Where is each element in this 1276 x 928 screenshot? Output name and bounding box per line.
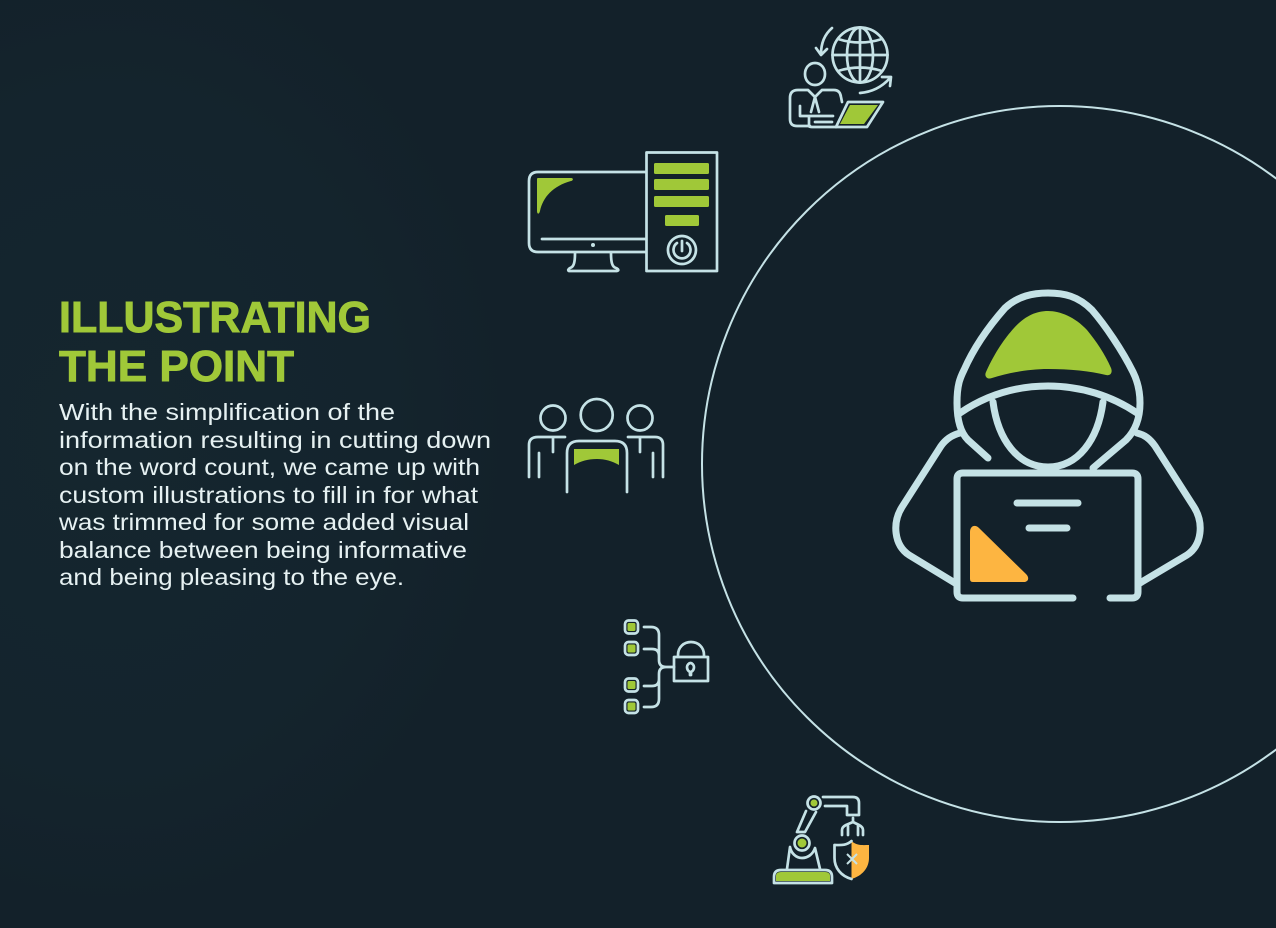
face	[993, 402, 1103, 467]
text block: description: and being pleasing to the eye.	[59, 564, 404, 590]
hood rim	[960, 386, 1137, 413]
title	[59, 293, 371, 391]
globe	[832, 28, 888, 82]
text block: description: balance between being informative	[59, 537, 467, 563]
arm dome	[787, 847, 820, 869]
text block: description: was trimmed for some added visual	[58, 509, 469, 535]
icon: network nodes to padlock	[625, 620, 708, 713]
top arm and gripper	[823, 797, 863, 835]
icon: team of three people	[529, 399, 663, 492]
person	[790, 63, 842, 127]
shield x	[847, 854, 857, 864]
arrows	[816, 28, 891, 93]
large circle outline	[702, 106, 1276, 822]
nodes	[625, 620, 638, 713]
laptop screen lines	[1017, 503, 1078, 528]
shield	[852, 841, 869, 879]
icon: person with globe and laptop	[790, 28, 891, 127]
arm segment	[797, 811, 816, 832]
padlock	[674, 642, 708, 681]
left arm	[896, 433, 960, 583]
tower	[646, 152, 717, 271]
text block: description: With the simplification of the	[59, 399, 395, 425]
right arm	[1137, 433, 1200, 583]
text block: description: information resulting in cutting down	[59, 427, 491, 453]
base	[776, 872, 830, 881]
monitor	[529, 172, 646, 271]
lower joint	[794, 836, 810, 850]
icon: robot arm with shield	[774, 796, 869, 883]
hood green fill	[985, 311, 1112, 379]
laptop	[836, 102, 883, 127]
title: ILLUSTRATING	[59, 293, 371, 342]
text block: description: custom illustrations to fill in for what	[59, 482, 479, 508]
orange triangle	[970, 526, 1028, 582]
laptop	[957, 473, 1138, 598]
title: THE POINT	[59, 342, 294, 391]
upper joint	[808, 796, 820, 810]
hood outline	[957, 293, 1140, 468]
power button	[668, 236, 696, 264]
icon: hooded hacker at laptop	[896, 293, 1200, 598]
text block: description	[58, 399, 491, 590]
green chest	[574, 449, 619, 465]
icon: desktop computer	[529, 152, 717, 271]
text block: description: on the word count, we came up with	[59, 454, 480, 480]
tower bars	[654, 163, 709, 174]
connectors	[644, 627, 674, 707]
monitor green glare	[537, 178, 573, 214]
